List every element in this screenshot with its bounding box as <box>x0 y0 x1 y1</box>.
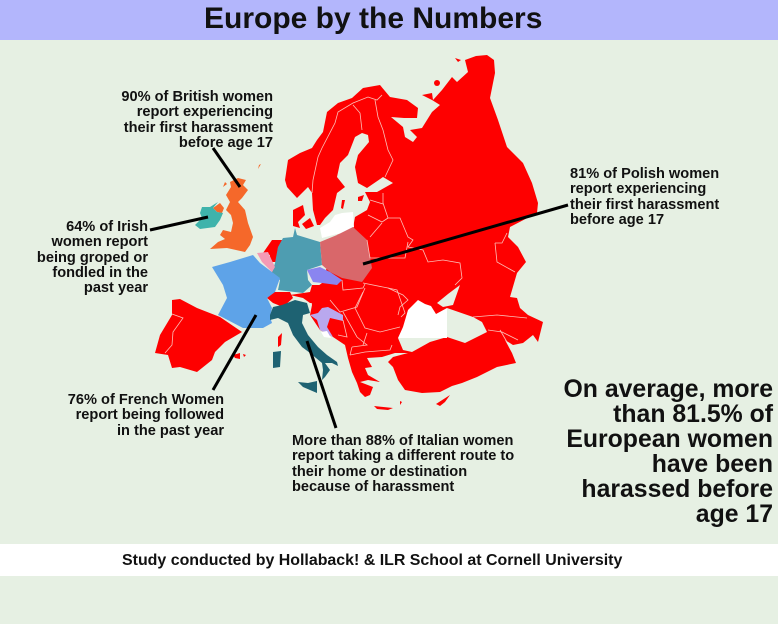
callout: Italy <box>292 433 514 495</box>
Black Sea white patch <box>398 300 447 338</box>
Rhodes <box>400 401 402 405</box>
callout: Britain: before age 17 <box>179 135 273 151</box>
callout: Ireland: being groped or <box>37 250 148 266</box>
leader line: Italy <box>307 341 336 428</box>
callout: Ireland <box>37 219 148 296</box>
footer credit: Study conducted by Hollaback! & ILR School at Cornell University <box>122 552 622 569</box>
Sardinia <box>273 351 281 368</box>
France <box>212 255 280 328</box>
leader line: Ireland <box>150 217 208 230</box>
summary statistic: age 17 <box>696 501 773 528</box>
Poland <box>320 227 372 282</box>
Sea of Azov <box>437 285 460 307</box>
callout: Italy: More than 88% of Italian women <box>292 433 513 449</box>
white Baltic patch <box>320 212 354 238</box>
title <box>0 0 778 40</box>
summary statistic: have been <box>652 451 773 478</box>
callout: France: report being followed <box>76 407 224 423</box>
leader line: Britain <box>213 148 240 187</box>
Netherlands <box>263 240 283 262</box>
Gotland and Saaremaa <box>341 200 345 209</box>
Czech Republic <box>307 267 342 285</box>
Great Britain <box>210 164 261 252</box>
Iberia <box>155 299 242 372</box>
Italy <box>270 300 338 393</box>
callout: Italy: report taking a different route to <box>292 448 514 464</box>
callout: Ireland: 64% of Irish <box>66 219 148 235</box>
Balearics <box>233 353 240 359</box>
Black Sea lower part <box>398 308 487 352</box>
country borders <box>165 95 527 355</box>
callout: France: 76% of French Women <box>68 392 224 408</box>
Crete <box>374 406 393 410</box>
callout: Poland: 81% of Polish women <box>570 166 719 182</box>
Kolguev <box>434 80 440 86</box>
callout: Poland: before age 17 <box>570 212 664 228</box>
Croatia <box>310 307 343 337</box>
callout: Britain: 90% of British women <box>121 89 273 105</box>
Corsica <box>278 333 282 347</box>
summary statistic: On average, more <box>564 376 773 403</box>
callout: France <box>68 392 224 439</box>
callout: Poland: report experiencing <box>570 181 706 197</box>
callout: France: in the past year <box>117 423 224 439</box>
summary statistic: European women <box>566 426 773 453</box>
leader line: France <box>213 315 256 390</box>
callout: Ireland: women report <box>52 234 148 250</box>
callout: Poland <box>570 166 720 228</box>
summary statistic: harassed before <box>581 476 773 503</box>
Ireland <box>195 202 223 229</box>
callout: Italy: because of harassment <box>292 479 454 495</box>
footer credit <box>0 544 778 576</box>
Sicily <box>298 381 317 393</box>
Germany <box>272 228 322 293</box>
title: Europe by the Numbers <box>204 2 542 35</box>
callout: Britain: report experiencing <box>137 104 273 120</box>
Denmark <box>293 205 305 228</box>
Belgium <box>257 252 275 272</box>
Cyprus <box>436 395 450 406</box>
callout: Italy: their home or destination <box>292 464 467 480</box>
summary statistic: than 81.5% of <box>613 401 773 428</box>
white Adriatic speck <box>321 331 331 338</box>
callout: Britain: their first harassment <box>124 120 273 136</box>
callout: Poland: their first harassment <box>570 197 719 213</box>
callout: Britain <box>121 89 273 151</box>
Austria and Switzerland <box>267 285 337 307</box>
summary statistic <box>564 376 774 528</box>
callout: Ireland: fondled in the <box>52 265 148 281</box>
leader line: Poland <box>363 205 568 264</box>
region: Scandinavia, Russia, eastern Europe and Turkey <box>155 55 543 410</box>
Northern Ireland <box>213 203 224 213</box>
Slovenia <box>312 304 327 313</box>
callout: Ireland: past year <box>84 280 148 296</box>
